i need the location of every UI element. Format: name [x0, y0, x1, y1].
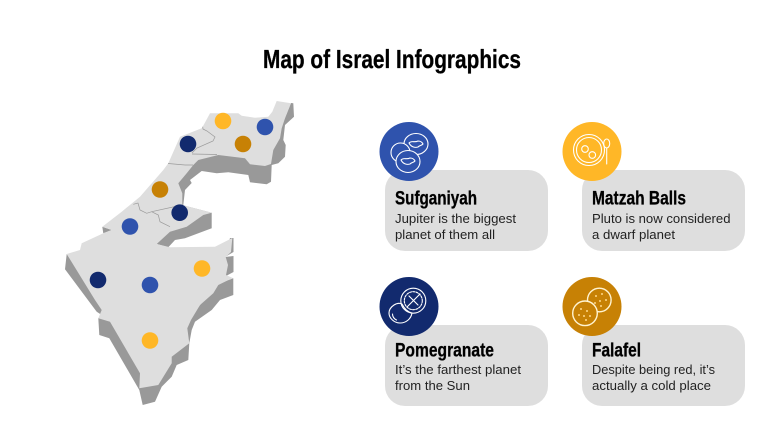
heading: Matzah Balls: Matzah Balls [592, 188, 686, 210]
text: Matzah Balls description: a dwarf planet [592, 227, 675, 242]
map location dots [90, 113, 273, 349]
panel: Matzah Balls [562, 122, 745, 251]
heading: Falafel: Falafel [592, 340, 641, 362]
icon: sufganiyah [380, 122, 438, 181]
panel: Sufganiyah [380, 122, 548, 251]
panel: Falafel [562, 277, 745, 406]
text: Falafel description: Despite being red, it’s [592, 362, 715, 377]
map side walls [65, 103, 294, 405]
text: Matzah Balls description: Pluto is now considered [592, 211, 730, 226]
text: Pomegranate description: from the Sun [395, 378, 470, 393]
text: Sufganiyah description: planet of them all [395, 227, 495, 242]
map of Israel [65, 101, 294, 405]
heading: Pomegranate: Pomegranate [395, 340, 494, 362]
icon: falafel [562, 277, 622, 336]
heading: Sufganiyah: Sufganiyah [395, 188, 477, 210]
icon: matzah balls soup [562, 122, 622, 181]
icon: pomegranate [380, 277, 438, 336]
panel: Pomegranate [380, 277, 548, 406]
title: Map of Israel Infographics [263, 44, 521, 74]
text: Pomegranate description: It’s the farthest planet [395, 362, 521, 377]
text: Sufganiyah description: Jupiter is the biggest [395, 211, 516, 226]
map district borders [133, 127, 217, 227]
text: Falafel description: actually a cold place [592, 378, 711, 393]
map top surface [67, 101, 291, 388]
